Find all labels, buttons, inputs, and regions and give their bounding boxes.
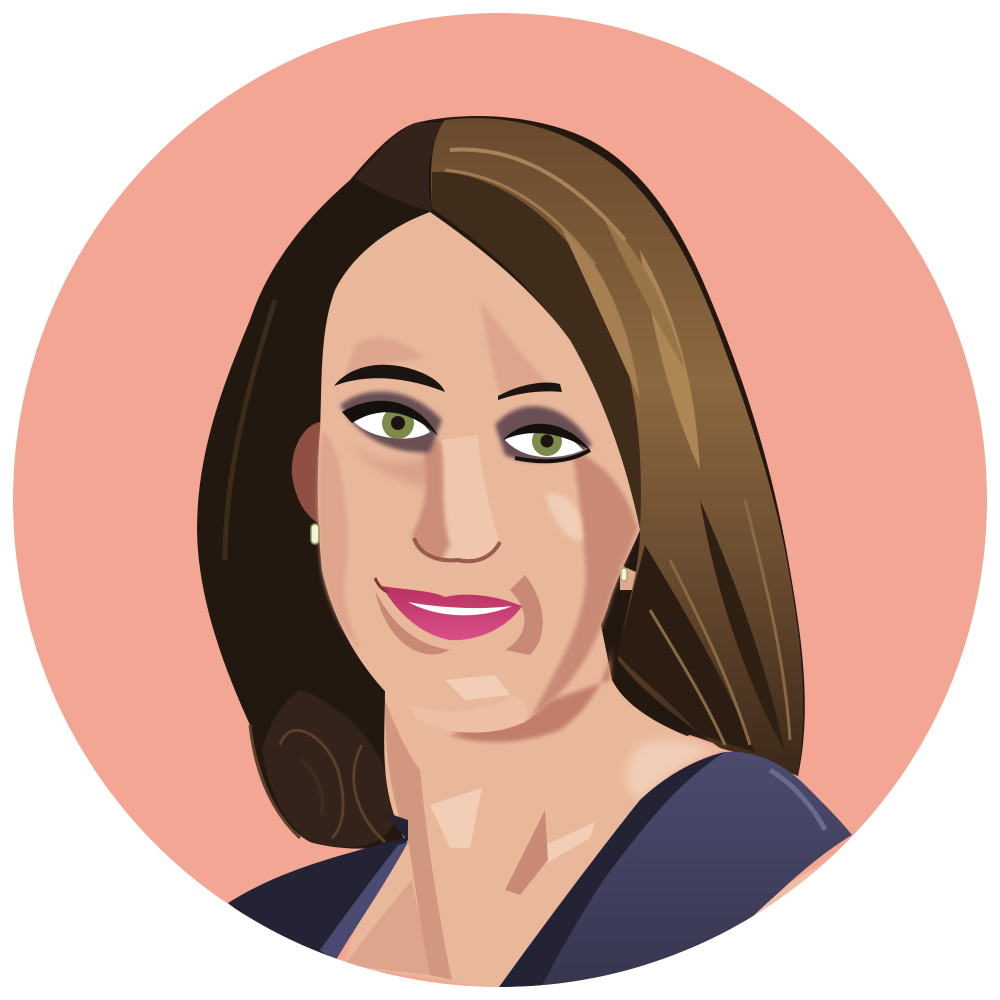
shoulder skin [753,864,824,916]
right eye [495,406,592,462]
hair back [197,116,805,849]
dress [228,752,852,990]
left eye [340,391,442,452]
under-eye shadow [362,454,427,489]
nose [440,435,499,559]
neck and chest [345,620,725,990]
mouth [375,578,522,640]
hair right light strands [431,118,803,776]
earrings [311,524,636,590]
cheek highlight [545,494,582,541]
left eyebrow [334,365,445,392]
right eyebrow [498,382,562,400]
ear left [292,422,322,525]
face [318,212,640,733]
